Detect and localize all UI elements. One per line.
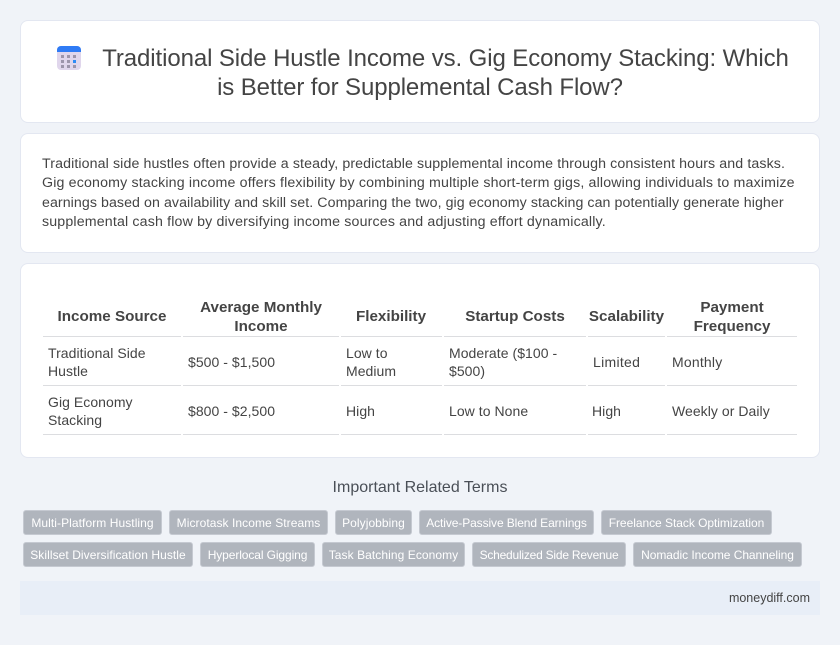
table row: gig economy stacking: High bbox=[346, 403, 375, 419]
table row: traditional side hustle: Moderate ($100 - bbox=[449, 345, 557, 361]
tag bbox=[335, 510, 412, 535]
table row: traditional side hustle: Medium bbox=[346, 363, 396, 379]
table row: traditional side hustle: Monthly bbox=[672, 354, 722, 370]
table header: Payment bbox=[700, 299, 764, 316]
tag: Polyjobbing bbox=[342, 516, 405, 530]
table row: gig economy stacking: Low to None bbox=[449, 403, 528, 419]
tag: Microtask Income Streams bbox=[177, 516, 320, 530]
table header: Income bbox=[234, 318, 288, 335]
title: Traditional Side Hustle Income vs. Gig Economy Stacking: Which bbox=[102, 45, 789, 72]
tag: Nomadic Income Channeling bbox=[641, 548, 794, 562]
tag: Multi-Platform Hustling bbox=[31, 516, 154, 530]
tag bbox=[322, 542, 465, 567]
heading: related terms: Important Related Terms bbox=[333, 479, 507, 496]
tag bbox=[633, 542, 802, 567]
table row: traditional side hustle: $500 - $1,500 bbox=[188, 354, 275, 370]
tag bbox=[23, 542, 193, 567]
table row: traditional side hustle: Hustle bbox=[48, 363, 88, 379]
tag: Active-Passive Blend Earnings bbox=[426, 516, 587, 530]
text block: summary bbox=[42, 156, 795, 230]
table row: traditional side hustle: Low to bbox=[346, 345, 388, 361]
tag: Task Batching Economy bbox=[329, 548, 458, 562]
text block: summary: Traditional side hustles often provide a steady, predictable supplemental income through consistent hours and tasks. bbox=[42, 156, 785, 172]
table header: Income Source bbox=[58, 308, 166, 325]
tag: Schedulized Side Revenue bbox=[480, 548, 618, 562]
table row: gig economy stacking: Gig Economy bbox=[48, 394, 133, 410]
tag: Freelance Stack Optimization bbox=[609, 516, 764, 530]
table row: traditional side hustle bbox=[48, 345, 722, 379]
title: is Better for Supplemental Cash Flow? bbox=[217, 74, 623, 101]
table header bbox=[58, 299, 770, 335]
table row: gig economy stacking: $800 - $2,500 bbox=[188, 403, 275, 419]
tag bbox=[419, 510, 594, 535]
table row: gig economy stacking bbox=[48, 394, 770, 428]
tag bbox=[601, 510, 772, 535]
table header: Frequency bbox=[694, 318, 770, 335]
tag bbox=[472, 542, 626, 567]
tag bbox=[169, 510, 328, 535]
table row: traditional side hustle: $500) bbox=[449, 363, 485, 379]
panel: title card bbox=[20, 20, 820, 123]
footer bbox=[20, 581, 820, 615]
tag bbox=[200, 542, 315, 567]
table row: gig economy stacking: Weekly or Daily bbox=[672, 403, 770, 419]
table row: gig economy stacking: Stacking bbox=[48, 412, 102, 428]
table row: traditional side hustle: Traditional Side bbox=[48, 345, 146, 361]
tag: Skillset Diversification Hustle bbox=[30, 548, 186, 562]
related terms tags bbox=[23, 510, 802, 567]
text block: summary: earnings based on availability and skill set. Comparing the two, gig economy stacking can potentially generate higher bbox=[42, 195, 784, 211]
tag bbox=[23, 510, 162, 535]
icon: calendar bbox=[57, 46, 81, 70]
table row: traditional side hustle: Limited bbox=[593, 354, 640, 370]
table header: Flexibility bbox=[356, 308, 426, 325]
title bbox=[102, 45, 789, 101]
text block: summary: Gig economy stacking income offers flexibility by combining multiple short-term gigs, allowing individuals to maximize bbox=[42, 175, 795, 191]
panel: summary bbox=[20, 133, 820, 253]
footer text: moneydiff.com bbox=[729, 591, 810, 605]
table header: Startup Costs bbox=[465, 308, 565, 325]
text block: summary: supplemental cash flow by diversifying income sources and adjusting effort dynamically. bbox=[42, 214, 606, 230]
table header: Average Monthly bbox=[200, 299, 322, 316]
table header: Scalability bbox=[589, 308, 664, 325]
panel: comparison table bbox=[20, 263, 820, 458]
tag: Hyperlocal Gigging bbox=[208, 548, 307, 562]
table row: gig economy stacking: High bbox=[592, 403, 621, 419]
